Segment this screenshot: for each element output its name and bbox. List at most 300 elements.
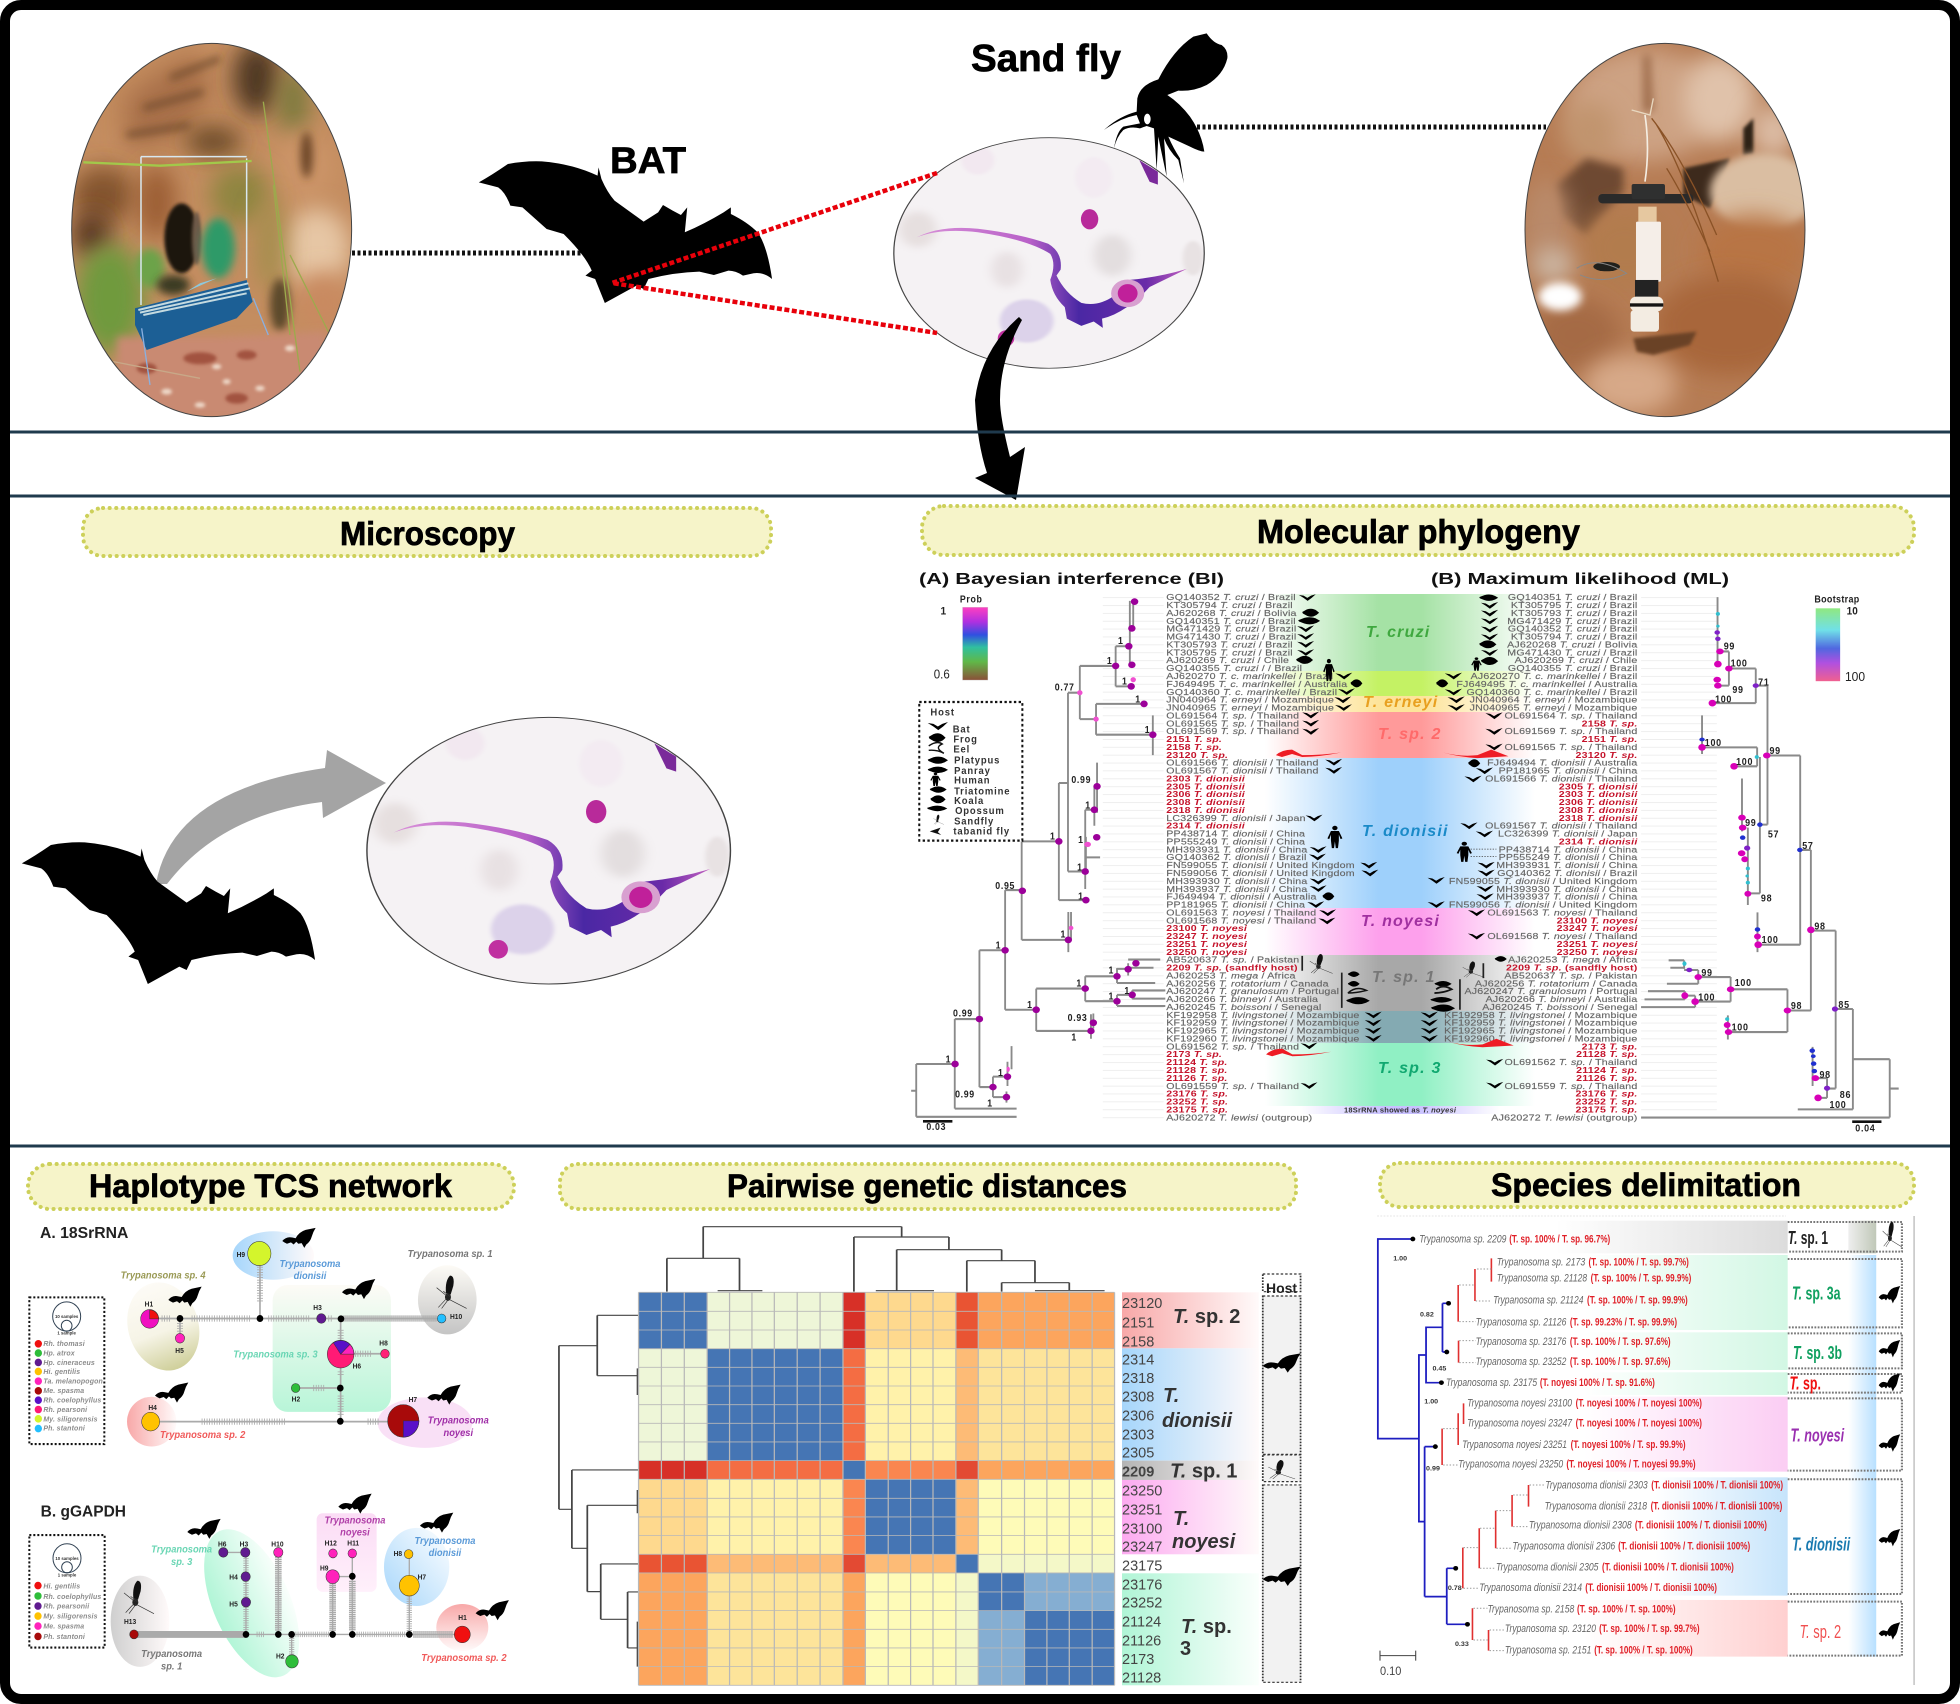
phylogenetic tree A: Bayesian: 1	[1050, 831, 1056, 842]
sequence labels: (T. dionisii 100% / T. dionisii 100%)	[1602, 1562, 1734, 1573]
sequence labels: Trypanosoma sp. 2151	[1505, 1645, 1591, 1657]
sequence labels: (T. sp. 100% / T. sp. 99.9%)	[1591, 1273, 1692, 1285]
network A: 18SrRNA: Trypanosoma sp. 3	[233, 1349, 318, 1361]
taxon labels: Bayesian tree: PP438714 T. dionisii / China	[1166, 830, 1306, 839]
taxon labels: Bayesian tree: GQ140355 T. cruzi / / Brazil	[1166, 664, 1302, 674]
taxon labels: Bayesian tree	[1166, 593, 1360, 1123]
sequence labels: (T. sp. 100% / T. sp. 99.7%)	[1599, 1623, 1700, 1635]
panel: species delimitation: 1.00	[1424, 1398, 1438, 1405]
taxon labels: maximum likelihood tree: KF192965 T. livingstonei / Mozambique	[1444, 1027, 1637, 1036]
sequence labels: Trypanosoma dionisii 2308	[1529, 1520, 1632, 1532]
scale bar: 0.10	[1380, 1664, 1401, 1678]
taxon labels: Bayesian tree: 2209 T. sp. (sandfly host)	[1166, 964, 1298, 973]
heatmap row labels: 23120	[1122, 1296, 1162, 1312]
network B: gGAPDH: H10	[271, 1541, 284, 1549]
heatmap row labels: 2158	[1122, 1334, 1154, 1350]
legend: 18SrRNA hosts: Ta. melanopogon	[43, 1377, 103, 1386]
taxon labels: maximum likelihood tree: AJ620272 T. lewisi (outgroup)	[1491, 1113, 1637, 1123]
panel: species delimitation: 1.00	[1393, 1256, 1407, 1263]
taxon labels: maximum likelihood tree: KT305795 T. cruzi / Brazil	[1511, 601, 1638, 611]
phylogenetic tree B: maximum likelihood: 100	[1698, 992, 1715, 1003]
taxon labels: maximum likelihood tree: OL691568 T. noyesi / Thailand	[1487, 932, 1637, 942]
taxon labels: Bayesian tree: OL691569 T. sp. / Thailand	[1166, 727, 1299, 737]
heading: Molecular phylogeny	[922, 506, 1914, 555]
heatmap species labels: noyesi	[1172, 1531, 1236, 1553]
host icons: tree A	[1266, 594, 1382, 1089]
phylogenetic tree A: Bayesian: 1	[946, 1054, 951, 1065]
phylogenetic tree A: Bayesian	[911, 594, 1382, 1132]
phylogenetic tree A: Bayesian: 1	[1109, 991, 1114, 1001]
heatmap row labels: 23247	[1122, 1540, 1162, 1556]
taxon labels: Bayesian tree: 2314 T. dionisii	[1166, 822, 1245, 831]
panel: haplotype TCS network	[29, 1225, 509, 1692]
phylogenetic tree A: Bayesian: 1	[987, 1098, 993, 1108]
taxon labels: maximum likelihood tree: AJ620253 T. mega / Africa	[1508, 956, 1638, 965]
legend: Host: Human	[954, 775, 990, 787]
taxon labels: Bayesian tree: AJ620253 T. mega / Africa	[1166, 971, 1296, 981]
taxon labels: Bayesian tree: AJ620256 T. rotatorium / Canada	[1166, 979, 1329, 989]
network B: gGAPDH: sp. 1	[161, 1661, 182, 1672]
tree branches	[1378, 1239, 1467, 1624]
panel: species delimitation: 0.99	[1426, 1465, 1440, 1472]
taxon labels: Bayesian tree: MH393937 T. dionisii / China	[1166, 885, 1308, 894]
taxon labels: Bayesian tree: GQ140351 T. cruzi / Brazil	[1166, 617, 1296, 626]
clade labels: T. sp. 3b	[1793, 1344, 1842, 1364]
sequence labels: Trypanosoma sp. 2173	[1497, 1257, 1586, 1268]
sequence labels: Trypanosoma noyesi 23251	[1462, 1439, 1567, 1451]
taxon labels: maximum likelihood tree: AJ620268 T. cruzi / Bolivia	[1507, 640, 1638, 650]
legend: 18SrRNA hosts: Hi. gentilis	[43, 1368, 80, 1376]
legend: 18SrRNA hosts: Hp. atrox	[43, 1349, 76, 1358]
taxon labels: maximum likelihood tree: AB520637 T. sp. / Pakistan	[1504, 971, 1638, 981]
clade labels: T. noyesi	[1791, 1426, 1845, 1446]
heatmap row labels: 23250	[1122, 1484, 1162, 1500]
dotted connector: sand fly to right photo	[1197, 124, 1546, 130]
network A: 18SrRNA: dionisii	[294, 1271, 327, 1282]
legend: Host: Bat	[953, 724, 971, 736]
host icons: tree B	[1421, 595, 1514, 1089]
heatmap row labels: 2305	[1122, 1446, 1154, 1462]
legend: Host: Triatomine	[954, 786, 1010, 798]
taxon labels: Bayesian tree: KT305793 T. cruzi / Brazil	[1166, 640, 1293, 650]
taxon labels: maximum likelihood tree: JN040964 T. erneyi / Mozambique	[1470, 696, 1637, 705]
heatmap species labels: T.	[1163, 1385, 1179, 1407]
taxon labels: Bayesian tree: OL691563 T. noyesi / Thailand	[1166, 908, 1316, 918]
phylogenetic tree A: Bayesian: 1	[996, 940, 1001, 951]
taxon labels: maximum likelihood tree: GQ140362 T. dionisii / Brazil	[1497, 869, 1638, 879]
network A: 18SrRNA: H10	[450, 1314, 462, 1321]
phylogenetic tree B: maximum likelihood: 85	[1838, 1000, 1850, 1010]
sequence labels: (T. dionisii 100% / T. dionisii 100%)	[1651, 1480, 1783, 1491]
taxon labels: maximum likelihood tree: PP438714 T. dionisii / China	[1499, 845, 1638, 855]
taxon labels: maximum likelihood tree: 21126 T. sp.	[1576, 1074, 1638, 1084]
legend: Host: Sandfly	[954, 816, 994, 828]
sequence labels: Trypanosoma sp. 21128	[1497, 1273, 1588, 1285]
taxon labels: maximum likelihood tree: FJ649494 T. dionisii / Australia	[1487, 759, 1638, 768]
sequence labels: Trypanosoma sp. 23176	[1476, 1336, 1567, 1348]
taxon labels: maximum likelihood tree: 21124 T. sp.	[1576, 1066, 1638, 1076]
taxon labels: Bayesian tree: KT305795 T. cruzi / Brazil	[1166, 648, 1293, 658]
heatmap row labels: 23251	[1122, 1502, 1162, 1518]
taxon labels: maximum likelihood tree: 23176 T. sp.	[1576, 1090, 1638, 1099]
taxon labels: Bayesian tree: MG471430 T. cruzi / Brazil	[1166, 633, 1296, 642]
legend: Host: tabanid fly	[953, 826, 1010, 838]
heatmap row labels: 2314	[1122, 1352, 1154, 1368]
taxon labels: maximum likelihood tree: 2306 T. dionisii	[1559, 798, 1638, 808]
taxon labels: maximum likelihood tree: 23252 T. sp.	[1576, 1097, 1638, 1107]
clade labels	[1788, 1229, 1851, 1643]
taxon labels: maximum likelihood tree: MG471429 T. cruzi / Brazil	[1507, 617, 1638, 626]
clade labels: T. dionisii	[1792, 1535, 1851, 1555]
arrow: grey bat to slide	[156, 750, 386, 884]
host icons	[1879, 1222, 1902, 1640]
heading: Haplotype TCS network	[28, 1164, 514, 1209]
phylogenetic tree B: maximum likelihood: 100	[1732, 1022, 1749, 1033]
phylogenetic tree B: maximum likelihood: 0.04	[1855, 1123, 1876, 1133]
taxon labels: maximum likelihood tree: 21128 T. sp.	[1576, 1050, 1638, 1060]
host column	[1263, 1274, 1301, 1682]
taxon labels: Bayesian tree: 21128 T. sp.	[1166, 1066, 1228, 1076]
taxon labels: Bayesian tree: 2173 T. sp.	[1166, 1050, 1222, 1060]
network B: gGAPDH: sp. 3	[171, 1557, 193, 1568]
network B: gGAPDH: H11	[347, 1540, 359, 1548]
taxon labels: Bayesian tree: 23120 T. sp.	[1166, 751, 1228, 760]
network B: gGAPDH: noyesi	[340, 1527, 370, 1538]
network A: 18SrRNA: H9	[237, 1252, 245, 1259]
heatmap species labels: T.	[1173, 1508, 1189, 1530]
legend: gGAPDH hosts: Rh. pearsonii	[43, 1602, 90, 1610]
taxon labels: Bayesian tree: OL691568 T. noyesi / Thailand	[1166, 916, 1316, 926]
legend: Bootstrap color scale	[1814, 594, 1865, 684]
sequence labels: Trypanosoma dionisii 2303	[1545, 1480, 1648, 1491]
taxon labels: maximum likelihood tree: MG471430 T. cruzi / Brazil	[1507, 648, 1638, 658]
taxon labels: Bayesian tree: 23247 T. noyesi	[1166, 932, 1247, 942]
legend: 18SrRNA hosts: Me. spasma	[43, 1387, 84, 1395]
phylogenetic tree B: maximum likelihood: 99	[1701, 968, 1713, 978]
taxon labels: Bayesian tree: 23251 T. noyesi	[1166, 940, 1247, 950]
panel: species delimitation: 0.45	[1432, 1365, 1447, 1372]
phylogenetic tree A: Bayesian: 0.77	[1055, 682, 1075, 693]
heading: Molecular phylogeny: Molecular phylogeny	[1257, 513, 1581, 550]
taxon labels: Bayesian tree: OL691566 T. dionisii / Thailand	[1166, 759, 1319, 768]
legend: Host: Platypus	[954, 755, 1000, 767]
heading: Microscopy	[83, 508, 771, 556]
sequence labels: (T. sp. 100% / T. sp. 100%)	[1577, 1604, 1676, 1616]
taxon labels: Bayesian tree: AJ620247 T. granulosum / Portugal	[1166, 987, 1339, 997]
sequence labels: Trypanosoma dionisii 2306	[1512, 1541, 1616, 1552]
phylogenetic tree B: maximum likelihood: 100	[1736, 757, 1753, 767]
label: Host: Host	[1266, 1280, 1297, 1296]
silhouette: bat	[479, 161, 772, 303]
heatmap species labels: T. sp. 1	[1170, 1460, 1237, 1482]
heatmap species labels	[1162, 1306, 1240, 1660]
taxon labels: Bayesian tree: MH393930 T. dionisii / China	[1166, 877, 1308, 887]
taxon labels: maximum likelihood tree: OL691566 T. dionisii / Thailand	[1485, 774, 1637, 784]
legend: Host: Panray	[954, 766, 991, 777]
legend: Prob color scale: 1	[941, 605, 946, 617]
phylogenetic tree A: Bayesian: 1	[1124, 986, 1130, 996]
taxon labels: Bayesian tree: 23175 T. sp.	[1166, 1105, 1228, 1115]
panel: species delimitation: 0.33	[1455, 1641, 1469, 1648]
taxon labels: maximum likelihood tree: 23120 T. sp.	[1576, 751, 1638, 760]
taxon labels: Bayesian tree: FN599056 T. dionisii / United Kingdom	[1166, 869, 1355, 879]
taxon labels: Bayesian tree: JN040965 T. erneyi / Mozambique	[1166, 703, 1334, 713]
taxon labels: maximum likelihood tree: 2305 T. dionisii	[1559, 782, 1638, 792]
network A: 18SrRNA: H5	[175, 1348, 184, 1355]
taxon labels: maximum likelihood tree: AJ620270 T. c. marinkellei / Brazil	[1471, 672, 1638, 682]
heatmap row labels: 23100	[1122, 1521, 1162, 1537]
network B: gGAPDH: H8	[394, 1551, 402, 1558]
dendrogram: top	[559, 1227, 1105, 1667]
phylogenetic tree A: Bayesian: 1	[1076, 978, 1082, 989]
phylogenetic tree A: Bayesian: 0.99	[953, 1008, 973, 1019]
phylogenetic tree B: maximum likelihood: 57	[1802, 841, 1814, 851]
taxon labels: Bayesian tree: FJ649494 T. dionisii / Australia	[1166, 893, 1317, 902]
panel: species delimitation: 0.78	[1448, 1585, 1462, 1592]
heatmap row labels: 23175	[1122, 1558, 1162, 1574]
network A: 18SrRNA: Trypanosoma	[428, 1416, 489, 1427]
network A: 18SrRNA: H4	[148, 1405, 157, 1412]
phylogenetic tree B: maximum likelihood: 98	[1814, 921, 1826, 932]
network B: gGAPDH: H9	[320, 1566, 329, 1573]
legend: 18SrRNA hosts: Rh. pearsoni	[43, 1406, 88, 1414]
network B: gGAPDH: Trypanosoma sp. 2	[421, 1653, 507, 1664]
taxon labels: maximum likelihood tree: AJ620266 T. binneyi / Australia	[1486, 995, 1638, 1005]
taxon labels: Bayesian tree: 23176 T. sp.	[1166, 1090, 1228, 1099]
network A: 18SrRNA: Trypanosoma sp. 2	[160, 1430, 246, 1441]
taxon labels: Bayesian tree: 23252 T. sp.	[1166, 1097, 1228, 1107]
phylogenetic tree A: Bayesian: 1	[1078, 891, 1084, 901]
taxon labels: maximum likelihood tree: 2173 T. sp.	[1582, 1042, 1638, 1052]
clade bands	[1556, 1221, 1876, 1657]
legend: gGAPDH hosts	[29, 1535, 105, 1648]
taxon labels: Bayesian tree: AJ620269 T. cruzi / Chile	[1166, 656, 1289, 666]
taxon labels: Bayesian tree: KT305794 T. cruzi / Brazil	[1166, 601, 1293, 611]
sequence labels: (T. dionisii 100% / T. dionisii 100%)	[1585, 1582, 1717, 1594]
network B: gGAPDH: H1	[458, 1615, 467, 1622]
heatmap species labels: T. sp.	[1181, 1616, 1232, 1638]
taxon labels: Bayesian tree: AJ620272 T. lewisi (outgroup)	[1166, 1113, 1312, 1123]
micrograph: trypanosome enlarged	[367, 717, 730, 984]
clade labels: T. sp. 2	[1378, 726, 1442, 743]
network A: 18SrRNA: H8	[379, 1340, 388, 1348]
sequence labels: (T. noyesi 100% / T. noyesi 100%)	[1576, 1398, 1702, 1409]
taxon labels: maximum likelihood tree: KT305794 T. cruzi / Brazil	[1511, 633, 1638, 642]
taxon labels: maximum likelihood tree: KT305793 T. cruzi / Brazil	[1511, 609, 1638, 619]
phylogenetic tree B: maximum likelihood: 57	[1768, 829, 1779, 840]
label: Sand fly: Sand fly	[971, 38, 1121, 80]
taxon labels: maximum likelihood tree: JN040965 T. erneyi / Mozambique	[1470, 703, 1637, 713]
network A: 18SrRNA: A. 18SrRNA	[40, 1225, 129, 1242]
silhouette: sand fly	[1104, 33, 1227, 183]
phylogenetic tree A: Bayesian: 1	[1135, 694, 1141, 704]
taxon labels: Bayesian tree: 2308 T. dionisii	[1166, 798, 1245, 808]
sequence labels: (T. sp. 100% / T. sp. 97.6%)	[1570, 1336, 1671, 1348]
heatmap row labels: 2308	[1122, 1390, 1154, 1406]
legend: Bootstrap color scale: 10	[1847, 606, 1858, 617]
sequence labels: Trypanosoma sp. 2158	[1487, 1604, 1575, 1616]
clade labels: T. erneyi	[1363, 694, 1438, 711]
sequence labels: (T. sp. 100% / T. sp. 99.7%)	[1588, 1257, 1689, 1268]
network A: 18SrRNA: H2	[292, 1396, 300, 1404]
dotted connector: left photo to bat	[352, 250, 581, 256]
taxon labels: Bayesian tree: JN040964 T. erneyi / Mozambique	[1166, 696, 1334, 705]
phylogenetic tree B: maximum likelihood: 100	[1715, 694, 1732, 704]
taxon labels: Bayesian tree: GQ140352 T. cruzi / Brazil	[1166, 593, 1296, 603]
phylogenetic tree A: Bayesian: 1	[1077, 862, 1083, 872]
heatmap species labels: 3	[1180, 1638, 1191, 1660]
sequence labels	[1419, 1234, 1783, 1657]
taxon labels: maximum likelihood tree: 23250 T. noyesi	[1557, 948, 1638, 957]
taxon labels: Bayesian tree: 23100 T. noyesi	[1166, 924, 1247, 934]
taxon labels: Bayesian tree: KF192965 T. livingstonei / Mozambique	[1166, 1027, 1360, 1036]
taxon labels: Bayesian tree: AJ620270 T. c. marinkellei / Brazil	[1166, 672, 1333, 682]
network B: gGAPDH	[41, 1494, 509, 1692]
sequence labels: (T. sp. 100% / T. sp. 99.9%)	[1587, 1295, 1688, 1307]
heading: Bayesian interference: (A) Bayesian interference (BI)	[919, 571, 1224, 588]
sequence labels: Trypanosoma sp. 23175	[1446, 1377, 1538, 1389]
taxon labels: maximum likelihood tree: KF192960 T. livingstonei / Mozambique	[1444, 1034, 1637, 1044]
taxon labels: Bayesian tree: MG471429 T. cruzi / Brazil	[1166, 625, 1296, 634]
taxon labels: maximum likelihood tree: GQ140360 T. c. marinkellei / Brazil	[1466, 688, 1638, 697]
taxon labels: maximum likelihood tree: 23251 T. noyesi	[1557, 940, 1638, 950]
heatmap row labels	[1122, 1296, 1162, 1686]
clade labels: T. noyesi	[1361, 913, 1440, 930]
taxon labels: maximum likelihood tree: OL691567 T. dionisii / Thailand	[1485, 822, 1637, 831]
taxon labels: Bayesian tree: AJ620245 T. boissoni / Senegal	[1166, 1003, 1322, 1013]
phylogenetic tree B: maximum likelihood: 100	[1735, 978, 1752, 988]
taxon labels: maximum likelihood tree: PP181965 T. dionisii / China	[1499, 767, 1638, 776]
phylogenetic tree A: Bayesian: 1	[1145, 724, 1150, 735]
panel: microscopy	[22, 717, 730, 984]
sequence labels: (T. noyesi 100% / T. sp. 99.9%)	[1571, 1439, 1686, 1451]
network B: gGAPDH: Trypanosoma	[151, 1545, 212, 1556]
legend: Host: Opossum	[955, 806, 1005, 817]
phylogenetic tree B: maximum likelihood: 99	[1724, 641, 1735, 652]
taxon labels: Bayesian tree: 21126 T. sp.	[1166, 1074, 1228, 1084]
sequence labels: (T. sp. 100% / T. sp. 97.6%)	[1570, 1356, 1671, 1368]
network A: 18SrRNA: H1	[145, 1301, 153, 1308]
species color bands	[1122, 1292, 1259, 1685]
network A: 18SrRNA: Trypanosoma sp. 4	[121, 1271, 206, 1282]
phylogenetic tree A: Bayesian: 1	[1061, 929, 1066, 939]
taxon labels: Bayesian tree: FJ649495 T. c. marinkellei / Australia	[1166, 680, 1348, 690]
taxon labels: Bayesian tree: LC326399 T. dionisii / Japan	[1166, 814, 1306, 823]
taxon labels: maximum likelihood tree: AJ620245 T. boissoni / Senegal	[1482, 1003, 1638, 1013]
taxon labels: maximum likelihood tree: FN599055 T. dionisii / United Kingdom	[1449, 877, 1637, 887]
sequence labels: (T. sp. 99.23% / T. sp. 99.9%)	[1570, 1317, 1677, 1329]
sequence labels: (T. dionisii 100% / T. dionisii 100%)	[1618, 1541, 1750, 1552]
taxon labels: maximum likelihood tree: GQ140352 T. cruzi / Brazil	[1508, 625, 1638, 634]
legend: Host	[919, 702, 1022, 841]
taxon labels: maximum likelihood tree: KF192958 T. livingstonei / Mozambique	[1444, 1011, 1637, 1020]
clade labels: T. dionisii	[1362, 823, 1449, 840]
network B: gGAPDH: H7	[418, 1575, 426, 1582]
taxon labels: Bayesian tree: OL691562 T. sp. / Thailand	[1166, 1042, 1299, 1052]
network B: gGAPDH: H4	[229, 1574, 238, 1581]
taxon labels: Bayesian tree: 2306 T. dionisii	[1166, 790, 1245, 800]
phylogenetic tree B: maximum likelihood: 100	[1705, 738, 1722, 748]
legend: gGAPDH hosts: Rh. coelophyllus	[43, 1593, 101, 1601]
phylogenetic tree B: maximum likelihood	[1421, 594, 1899, 1133]
taxon labels: maximum likelihood tree: OL691562 T. sp. / Thailand	[1504, 1058, 1637, 1068]
taxon labels: maximum likelihood tree: MH393930 T. dionisii / China	[1496, 885, 1638, 894]
network A: 18SrRNA: Trypanosoma sp. 1	[408, 1249, 493, 1260]
phylogenetic tree A: Bayesian: 1	[1122, 676, 1128, 687]
clade labels: T. cruzi	[1366, 624, 1430, 641]
sequence labels: Trypanosoma noyesi 23247	[1467, 1418, 1573, 1430]
heading: Haplotype TCS network: Haplotype TCS network	[89, 1168, 452, 1204]
taxon labels: maximum likelihood tree: 2318 T. dionisii	[1559, 814, 1638, 823]
heading: Species delimitation	[1380, 1163, 1914, 1207]
phylogenetic tree A: Bayesian: 0.03	[926, 1122, 946, 1132]
sequence labels: (T. noyesi 100% / T. noyesi 100%)	[1576, 1418, 1702, 1430]
taxon labels: maximum likelihood tree: OL691569 T. sp. / Thailand	[1504, 727, 1637, 737]
taxon labels: Bayesian tree: AB520637 T. sp. / Pakistan	[1166, 956, 1299, 965]
legend: Bootstrap color scale: 100	[1845, 669, 1865, 684]
network B: gGAPDH: Trypanosoma	[141, 1649, 202, 1660]
taxon labels: maximum likelihood tree: AJ620256 T. rotatorium / Canada	[1475, 979, 1638, 989]
taxon labels: maximum likelihood tree: OL691565 T. sp. / Thailand	[1504, 743, 1637, 753]
network A: 18SrRNA: Trypanosoma	[279, 1259, 340, 1270]
phylogenetic tree B: maximum likelihood: 71	[1758, 677, 1769, 687]
taxon labels: maximum likelihood tree: 23175 T. sp.	[1576, 1105, 1638, 1115]
phylogenetic tree B: maximum likelihood: 98	[1761, 893, 1772, 904]
taxon labels: maximum likelihood tree: 2308 T. dionisii	[1559, 806, 1638, 816]
clade labels: T. sp. 2	[1799, 1623, 1841, 1643]
legend: 18SrRNA hosts	[29, 1297, 104, 1444]
taxon labels: maximum likelihood tree: 2158 T. sp.	[1582, 719, 1638, 729]
taxon labels: maximum likelihood tree: PP555249 T. dionisii / China	[1499, 853, 1638, 863]
network A: 18SrRNA: noyesi	[444, 1428, 473, 1439]
phylogenetic tree A: Bayesian: 1	[998, 1068, 1004, 1078]
taxon labels: maximum likelihood tree: AJ620269 T. cruzi / Chile	[1515, 656, 1638, 666]
network B: gGAPDH: H12	[325, 1540, 337, 1548]
sequence labels: Trypanosoma sp. 23252	[1476, 1356, 1566, 1368]
network B: gGAPDH: H13	[124, 1619, 136, 1626]
taxon labels: maximum likelihood tree: OL691563 T. noyesi / Thailand	[1487, 908, 1637, 918]
sequence labels: Trypanosoma sp. 2209	[1419, 1234, 1506, 1246]
legend: Prob color scale	[934, 594, 988, 682]
network A: 18SrRNA: H7	[409, 1397, 417, 1404]
taxon labels: Bayesian tree: OL691559 T. sp. / Thailand	[1166, 1082, 1299, 1091]
heatmap row labels: 2173	[1122, 1652, 1154, 1668]
legend: gGAPDH hosts: My. siligorensis	[43, 1612, 98, 1621]
phylogenetic tree B: maximum likelihood: 98	[1791, 1001, 1802, 1011]
legend: Prob color scale: Prob	[960, 594, 983, 605]
taxon labels: Bayesian tree: MH393931 T. dionisii / China	[1166, 845, 1308, 855]
sequence labels: Trypanosoma sp. 23120	[1505, 1623, 1597, 1635]
taxon labels: maximum likelihood tree: GQ140355 T. cruzi / Brazil	[1508, 664, 1638, 674]
phylogenetic tree B: maximum likelihood: 99	[1732, 685, 1744, 695]
taxon labels: Bayesian tree: 23250 T. noyesi	[1166, 948, 1247, 957]
taxon labels: maximum likelihood tree: AJ620247 T. granulosum / Portugal	[1465, 987, 1638, 997]
sequence labels: Trypanosoma noyesi 23100	[1467, 1398, 1573, 1409]
taxon labels: maximum likelihood tree: 2151 T. sp.	[1582, 735, 1638, 745]
legend: Host: Frog	[953, 734, 978, 746]
taxon labels: maximum likelihood tree: MH393937 T. dionisii / China	[1496, 893, 1638, 902]
taxon labels: maximum likelihood tree: FN599056 T. dionisii / United Kingdom	[1449, 900, 1637, 910]
phylogenetic tree A: Bayesian: 1	[1071, 1032, 1077, 1043]
heatmap species labels: T. sp. 2	[1173, 1306, 1240, 1328]
taxon labels: maximum likelihood tree: FJ649495 T. c. marinkellei / Australia	[1456, 680, 1638, 690]
taxon labels: maximum likelihood tree: 2314 T. dionisii	[1559, 837, 1638, 847]
taxon labels: maximum likelihood tree: 23100 T. noyesi	[1557, 916, 1638, 926]
heatmap row labels: 23252	[1122, 1596, 1162, 1612]
taxon labels: Bayesian tree: AJ620268 T. cruzi / Bolivia	[1166, 609, 1297, 619]
legend: 18SrRNA hosts: Ph. stantoni	[43, 1424, 86, 1433]
taxon labels: Bayesian tree: KF192959 T. livingstonei / Mozambique	[1166, 1019, 1360, 1028]
